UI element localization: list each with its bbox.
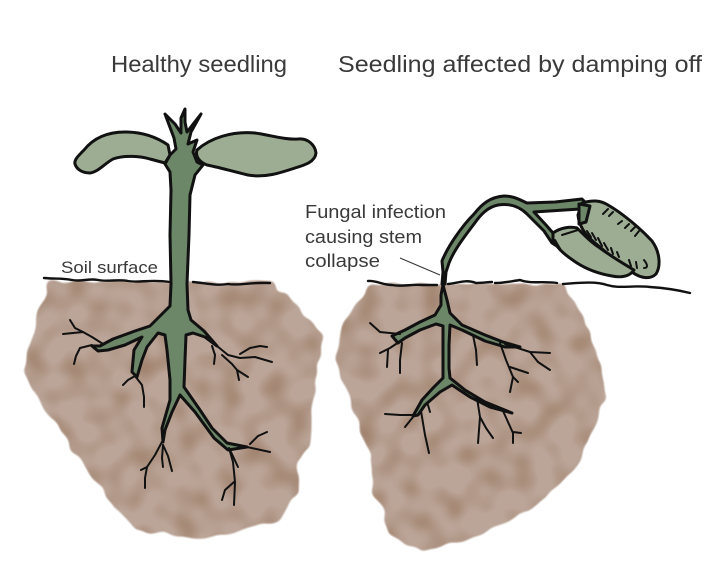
back cotyledon xyxy=(578,201,659,278)
root hairs xyxy=(370,323,550,453)
pointer line to infection site xyxy=(400,258,440,275)
healthy seedling xyxy=(63,109,316,505)
cotyledon shading marks xyxy=(555,204,647,268)
soil surface line: right xyxy=(368,280,690,293)
soil block: right xyxy=(335,284,605,551)
collapsed stem and branches xyxy=(442,196,588,284)
label: fungal infection causing stem collapse: Fungal infection xyxy=(305,202,446,222)
roots xyxy=(392,285,520,416)
heading: seedling affected by damping off: Seedling affected by damping off xyxy=(338,51,703,77)
front cotyledon xyxy=(553,227,634,277)
label: fungal infection causing stem collapse xyxy=(305,202,446,271)
label: fungal infection causing stem collapse: collapse xyxy=(305,251,380,271)
root hairs xyxy=(63,320,272,505)
left cotyledon xyxy=(75,132,170,173)
label: fungal infection causing stem collapse: causing stem xyxy=(305,227,422,247)
soil block: left xyxy=(23,282,325,538)
right cotyledon xyxy=(196,133,316,176)
label: soil surface: Soil surface xyxy=(61,258,158,277)
soil surface line: left xyxy=(44,278,270,285)
heading: healthy seedling: Healthy seedling xyxy=(111,51,287,77)
stem and growing tip xyxy=(92,109,247,450)
seedling affected by damping off xyxy=(370,196,659,453)
